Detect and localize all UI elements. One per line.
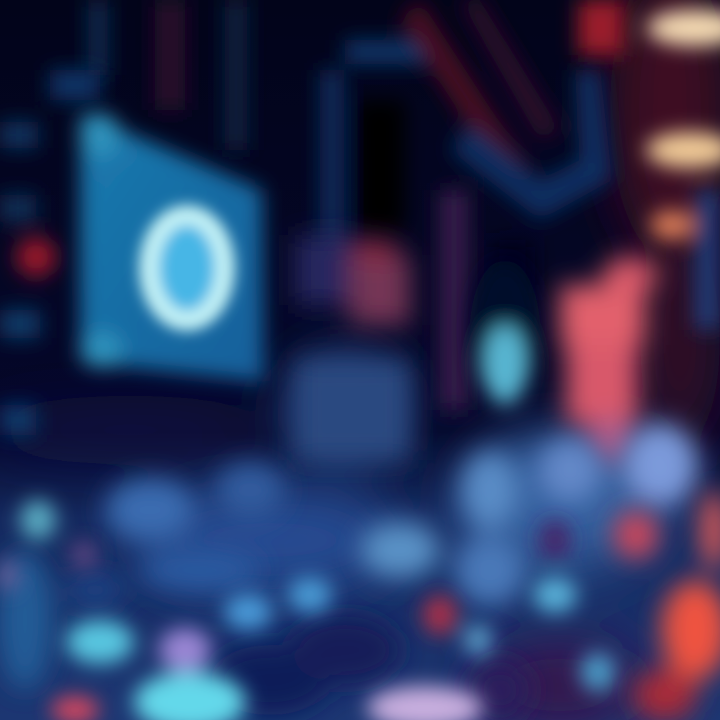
lower blue cluster: [0, 423, 698, 720]
centre reddish block: [295, 235, 410, 460]
icon: cyan oval: [470, 260, 540, 405]
panel: blue square screen: [80, 112, 264, 382]
bottom right red glow: [614, 490, 720, 720]
left side indicators: [0, 70, 100, 435]
icon: glowing ring: [149, 215, 225, 321]
bright lower dots: [0, 500, 616, 720]
salmon column: [560, 257, 658, 462]
top right lights: [578, 0, 720, 330]
dark vertical traces: [88, 0, 612, 410]
